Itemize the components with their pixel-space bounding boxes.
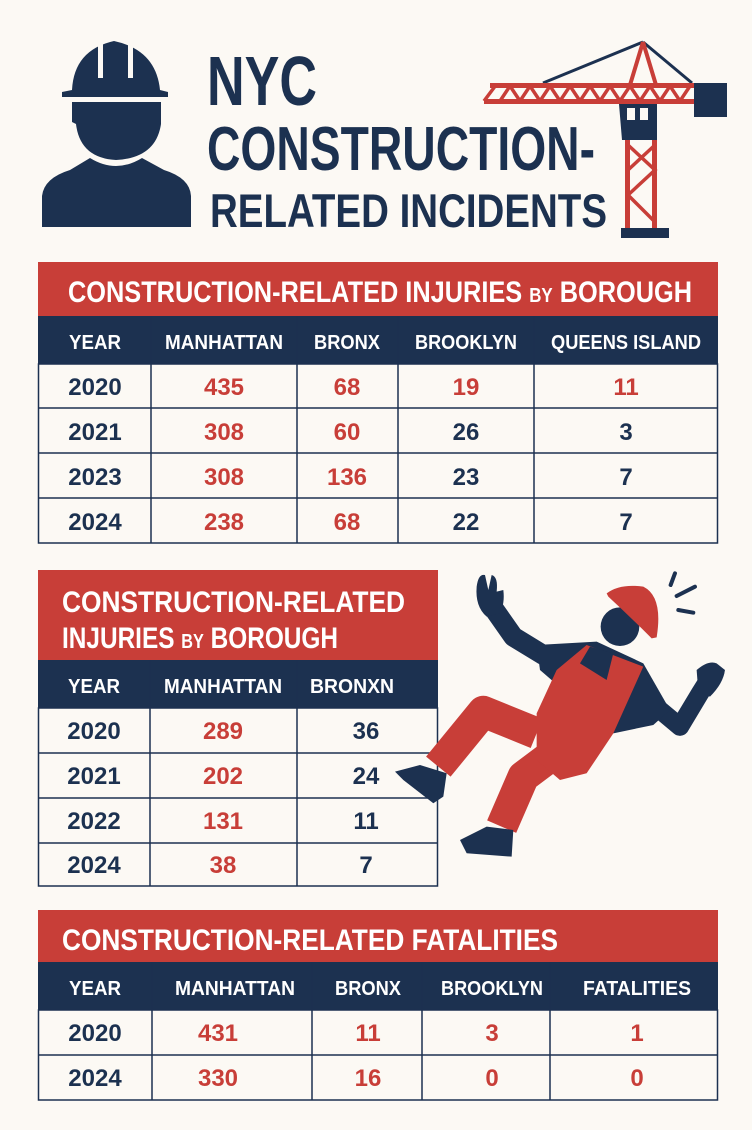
panel: injuries by borough table 2: MANHATTAN (164, 676, 282, 698)
panel: injuries by borough table 1: 136 (327, 464, 367, 491)
panel: injuries by borough table 2: 2022 (67, 808, 121, 835)
panel: injuries by borough table 1: 23 (453, 464, 479, 491)
panel: fatalities table: YEAR (69, 978, 122, 1000)
panel: injuries by borough table 1: YEAR (69, 332, 122, 354)
title: NYC (207, 42, 317, 120)
icon: worker with hard hat (42, 41, 191, 227)
heading: table 2 title (62, 586, 405, 655)
panel: injuries by borough table 1: 2020 (68, 374, 122, 401)
heading: table 2 title: INJURIES BY BOROUGH (62, 622, 338, 655)
panel: injuries by borough table 1: 68 (334, 374, 360, 401)
panel: fatalities table: 16 (355, 1065, 381, 1092)
panel: injuries by borough table 2: 24 (353, 763, 380, 790)
panel: fatalities table: 0 (630, 1065, 644, 1092)
icon: falling worker (395, 573, 725, 857)
panel: fatalities table: 1 (630, 1020, 644, 1047)
panel: injuries by borough table 1: BROOKLYN (415, 332, 517, 354)
panel: injuries by borough table 2: 2024 (67, 852, 121, 879)
panel: injuries by borough table 1: 19 (453, 374, 479, 401)
panel: injuries by borough table 1: BRONX (314, 332, 381, 354)
panel: fatalities table: 3 (485, 1020, 499, 1047)
panel: injuries by borough table 2: BRONXN (310, 676, 394, 698)
panel: fatalities table: 2024 (68, 1065, 122, 1092)
panel: injuries by borough table 1: QUEENS ISLAND (551, 332, 701, 354)
icon: tower crane (484, 42, 727, 238)
panel: injuries by borough table 2: 289 (203, 718, 243, 745)
panel: injuries by borough table 2: 2020 (67, 718, 121, 745)
panel: injuries by borough table 2: 2021 (67, 763, 121, 790)
panel: fatalities table: BROOKLYN (441, 978, 543, 1000)
panel: fatalities table: MANHATTAN (175, 978, 295, 1000)
panel: injuries by borough table 1: 22 (453, 509, 479, 536)
heading: fatalities title: CONSTRUCTION-RELATED FATALITIES (62, 924, 558, 957)
panel: injuries by borough table 2: 11 (353, 808, 379, 835)
title (207, 42, 607, 237)
heading: table 1 title: CONSTRUCTION-RELATED INJURIES BY BOROUGH (68, 276, 692, 309)
panel: injuries by borough table 1 (38, 262, 718, 543)
panel: injuries by borough table 1: 238 (204, 509, 244, 536)
panel: injuries by borough table 2: YEAR (68, 676, 121, 698)
panel: injuries by borough table 1: 2023 (68, 464, 122, 491)
panel: fatalities table: 330 (198, 1065, 238, 1092)
panel: injuries by borough table 1: 11 (613, 374, 639, 401)
panel: fatalities table: 2020 (68, 1020, 122, 1047)
panel: injuries by borough table 1: 7 (619, 509, 633, 536)
panel: injuries by borough table 2: 202 (203, 763, 243, 790)
panel: fatalities table: FATALITIES (583, 978, 691, 1000)
panel: injuries by borough table 1: 68 (334, 509, 360, 536)
panel: fatalities table: 0 (485, 1065, 499, 1092)
panel: injuries by borough table 1: 60 (334, 419, 360, 446)
panel: fatalities table: 11 (355, 1020, 381, 1047)
panel: injuries by borough table 2: 38 (210, 852, 236, 879)
panel: fatalities table: BRONX (335, 978, 402, 1000)
panel: injuries by borough table 1: 26 (453, 419, 479, 446)
heading: table 2 title: CONSTRUCTION-RELATED (62, 586, 405, 619)
panel: fatalities table: 431 (198, 1020, 238, 1047)
panel: injuries by borough table 1: 3 (619, 419, 633, 446)
title: RELATED INCIDENTS (210, 184, 607, 237)
panel: fatalities table (38, 910, 718, 1100)
panel: injuries by borough table 1: 2021 (68, 419, 122, 446)
panel: injuries by borough table 2 (38, 570, 438, 886)
panel: injuries by borough table 2: 131 (203, 808, 243, 835)
panel: injuries by borough table 1: 435 (204, 374, 244, 401)
panel: injuries by borough table 1: MANHATTAN (165, 332, 283, 354)
title: CONSTRUCTION- (207, 115, 595, 184)
panel: injuries by borough table 1: 7 (619, 464, 633, 491)
panel: injuries by borough table 2: 7 (359, 852, 373, 879)
panel: injuries by borough table 2: 36 (353, 718, 379, 745)
panel: injuries by borough table 1: 308 (204, 464, 244, 491)
panel: injuries by borough table 1: 2024 (68, 509, 122, 536)
panel: injuries by borough table 1: 308 (204, 419, 244, 446)
